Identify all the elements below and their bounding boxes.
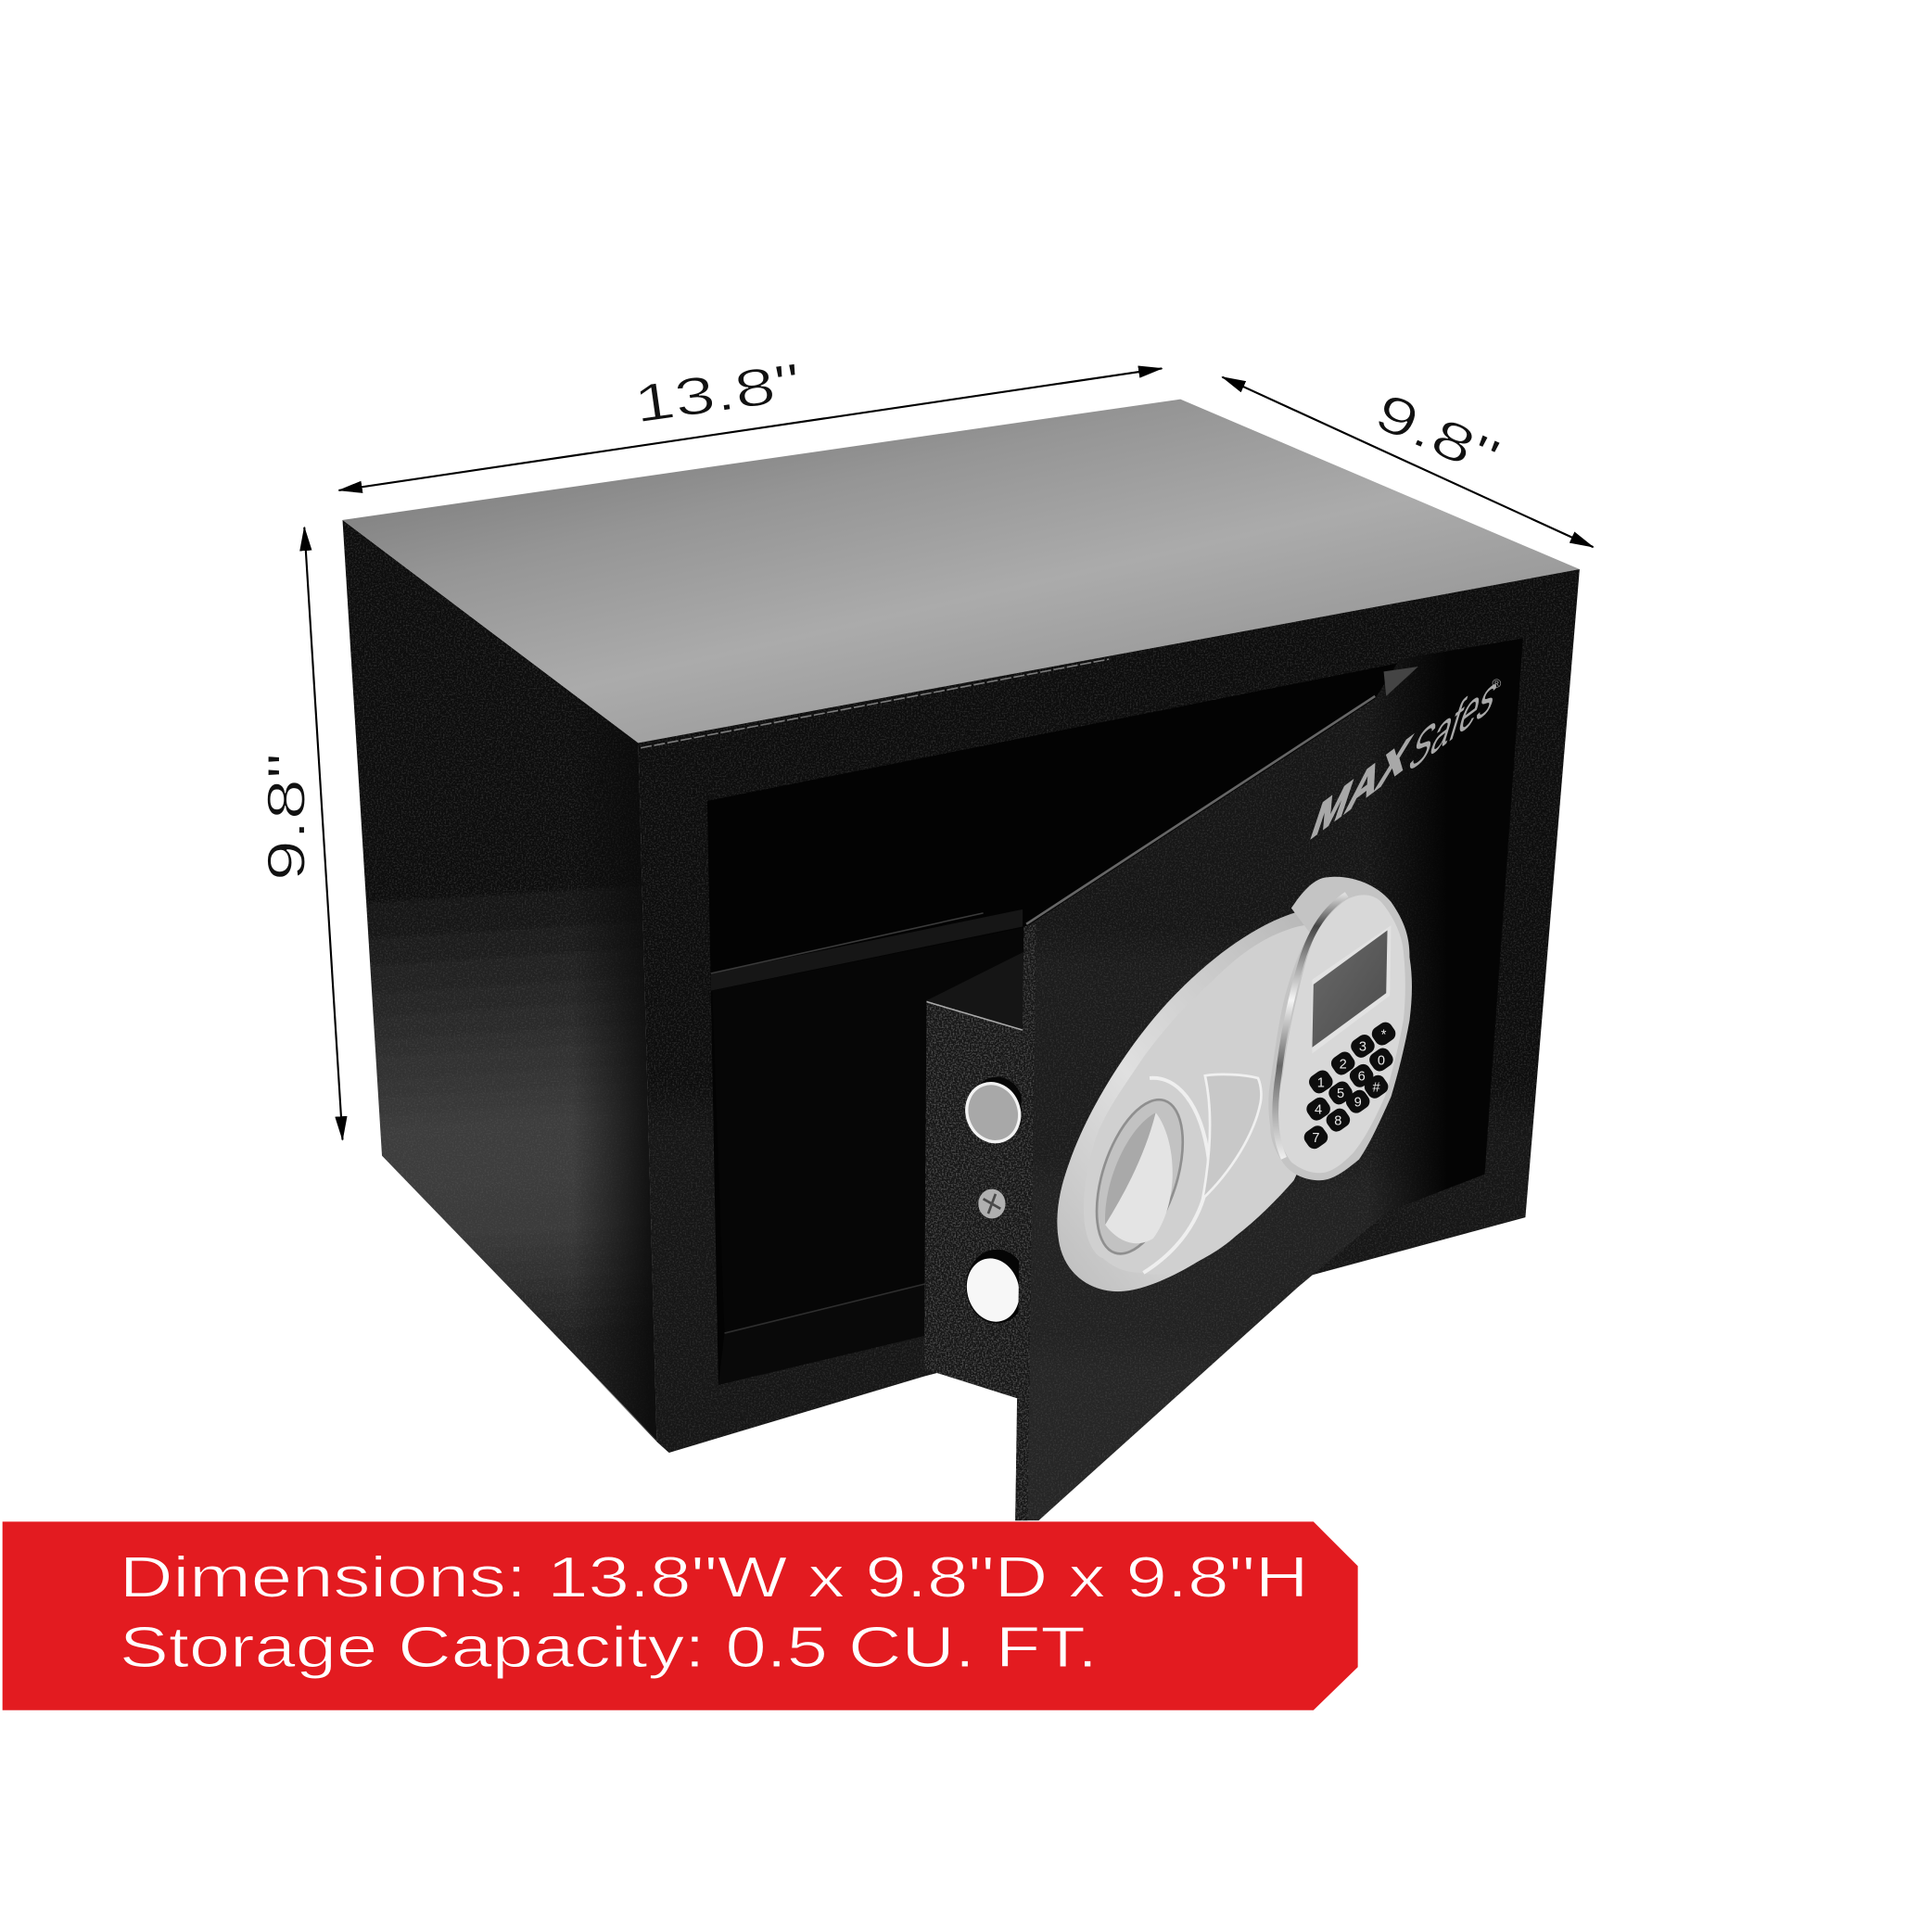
door right fade <box>1367 638 1523 1228</box>
safe front highlight edge <box>641 659 1109 748</box>
Safes wordmark: Safes <box>1402 659 1506 786</box>
door hinge piece <box>1384 667 1418 696</box>
key labels: 0 <box>1378 1053 1385 1068</box>
LCD bezel <box>1312 925 1392 1053</box>
chrome ring <box>1276 895 1347 1158</box>
interior lower section <box>712 926 1029 1333</box>
door top edge <box>1026 696 1375 924</box>
safe left side <box>342 520 669 1453</box>
key labels: 6 <box>1358 1070 1366 1085</box>
bolt bottom <box>960 1250 1027 1328</box>
capacity text: Storage Capacity: 0.5 CU. FT. <box>120 1615 1098 1680</box>
key labels: 8 <box>1334 1113 1341 1128</box>
key labels: 4 <box>1315 1102 1322 1117</box>
block top highlight <box>926 1002 1023 1030</box>
interior floor <box>718 1284 925 1385</box>
dimensions text: Dimensions: 13.8"W x 9.8"D x 9.8"H <box>120 1544 1308 1609</box>
door side block top <box>926 951 1025 1030</box>
key labels: 5 <box>1337 1087 1344 1101</box>
plate triangle <box>1202 1074 1261 1199</box>
oval plate <box>1057 906 1355 1291</box>
brand logo <box>1305 659 1506 851</box>
key labels: # <box>1373 1081 1381 1096</box>
screw <box>978 1189 1006 1218</box>
left side right shading <box>573 693 656 1442</box>
handle shaded face <box>1105 1112 1156 1225</box>
arrow: depth <box>1222 377 1594 547</box>
safe product <box>342 400 1580 1520</box>
key labels: 9 <box>1354 1096 1362 1111</box>
bolt top <box>959 1076 1027 1150</box>
banner shape <box>3 1521 1358 1710</box>
key labels: 3 <box>1359 1040 1366 1055</box>
keypad face <box>1278 895 1405 1173</box>
door panel <box>1015 638 1523 1520</box>
safe interior opening <box>707 638 1523 1385</box>
key labels: 2 <box>1340 1057 1347 1072</box>
handle lit face <box>1105 1112 1173 1243</box>
height label: 9.8" <box>257 753 316 881</box>
door side block <box>924 1000 1025 1399</box>
registered mark: ® <box>1493 677 1502 691</box>
LCD screen <box>1312 930 1388 1048</box>
width label: 13.8" <box>630 352 805 435</box>
keypad outer <box>1268 877 1412 1180</box>
safe top <box>342 400 1580 743</box>
keypad keys <box>1302 1020 1398 1151</box>
swoosh <box>1143 1078 1209 1273</box>
handle ring <box>1080 1089 1200 1265</box>
safe front frame <box>638 569 1580 1453</box>
key labels: 1 <box>1317 1075 1325 1090</box>
door edge <box>1015 924 1036 1520</box>
lock body <box>1057 877 1412 1291</box>
arrow: width <box>338 368 1162 490</box>
floor highlight <box>725 1284 925 1333</box>
depth label: 9.8" <box>1366 382 1507 489</box>
key labels <box>1312 1027 1387 1146</box>
plate inner <box>1084 918 1355 1275</box>
interior shelf <box>711 909 1023 991</box>
MAX wordmark: MAX <box>1305 723 1417 851</box>
shelf highlight <box>711 913 984 973</box>
red banner <box>3 1521 1358 1710</box>
key labels: * <box>1381 1027 1387 1042</box>
arrow: height <box>304 527 342 1139</box>
key labels: 7 <box>1312 1131 1320 1146</box>
